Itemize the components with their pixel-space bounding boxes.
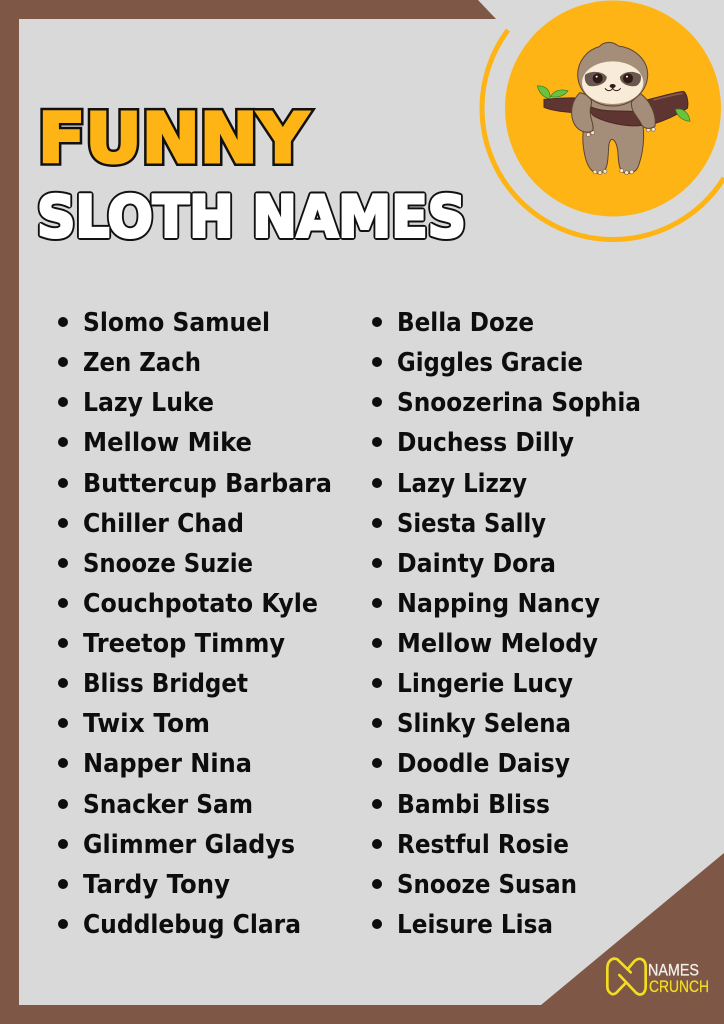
sloth badge [482, 0, 724, 240]
toes [586, 127, 655, 175]
names list: right column: Siesta Sally [397, 509, 546, 539]
names list: right column [372, 308, 641, 940]
names list: left column: Buttercup Barbara [83, 469, 332, 499]
names list: right column: Giggles Gracie [397, 348, 583, 378]
title: SLOTH NAMES: SLOTH NAMES [37, 184, 466, 250]
names list: right column: Mellow Melody [397, 629, 598, 659]
logo: Names Crunch [607, 959, 709, 996]
title: FUNNY: FUNNY [38, 99, 309, 179]
mouth [610, 84, 616, 88]
names list: right column: Bella Doze [397, 308, 534, 338]
names list: right column: Slinky Selena [397, 709, 571, 739]
names list: left column: Chiller Chad [83, 509, 244, 539]
icon: N mark [607, 959, 646, 995]
names list: left column: Napper Nina [83, 749, 252, 779]
icon: sloth on branch [537, 42, 690, 175]
names list: left column: Snooze Suzie [83, 549, 253, 579]
logo text: NAMES [648, 960, 699, 980]
names list: left column: Tardy Tony [83, 870, 230, 900]
names list: right column: Bambi Bliss [397, 790, 550, 820]
branch [544, 98, 580, 113]
names list: left column: Twix Tom [83, 709, 210, 739]
title: FUNNY: FUNNY [38, 99, 309, 179]
names list: left column: Glimmer Gladys [83, 830, 295, 860]
eyes [593, 73, 603, 83]
head [578, 42, 648, 106]
names list: right column: Lingerie Lucy [397, 669, 573, 699]
names list: right column: Restful Rosie [397, 830, 569, 860]
names list: right column: Napping Nancy [397, 589, 600, 619]
names list: right column: Snooze Susan [397, 870, 577, 900]
eye patches [585, 72, 607, 86]
names list: right column: Duchess Dilly [397, 428, 574, 458]
title: SLOTH NAMES: SLOTH NAMES [37, 184, 466, 250]
orange circle [505, 0, 721, 216]
names list: left column: Bliss Bridget [83, 669, 248, 699]
body and legs [583, 100, 644, 173]
names list: left column: Couchpotato Kyle [83, 589, 318, 619]
leaves [537, 86, 550, 99]
names list: right column: Lazy Lizzy [397, 469, 527, 499]
names list: left column: Mellow Mike [83, 428, 252, 458]
logo: Names Crunch: CRUNCH [649, 977, 709, 996]
face [582, 61, 643, 104]
names list: right column: Dainty Dora [397, 549, 556, 579]
names list: left column: Zen Zach [83, 348, 201, 378]
names list: left column: Lazy Luke [83, 388, 214, 418]
names list: left column: Cuddlebug Clara [83, 910, 301, 940]
names list: left column: Slomo Samuel [83, 308, 270, 338]
names list: right column: Doodle Daisy [397, 749, 570, 779]
names list: left column [58, 308, 332, 940]
names list: right column: Snoozerina Sophia [397, 388, 641, 418]
names list: left column: Treetop Timmy [83, 629, 285, 659]
names list: left column: Snacker Sam [83, 790, 253, 820]
arms [572, 93, 593, 132]
center branch [590, 107, 642, 126]
orange ring [482, 30, 724, 240]
names list: right column: Leisure Lisa [397, 910, 553, 940]
